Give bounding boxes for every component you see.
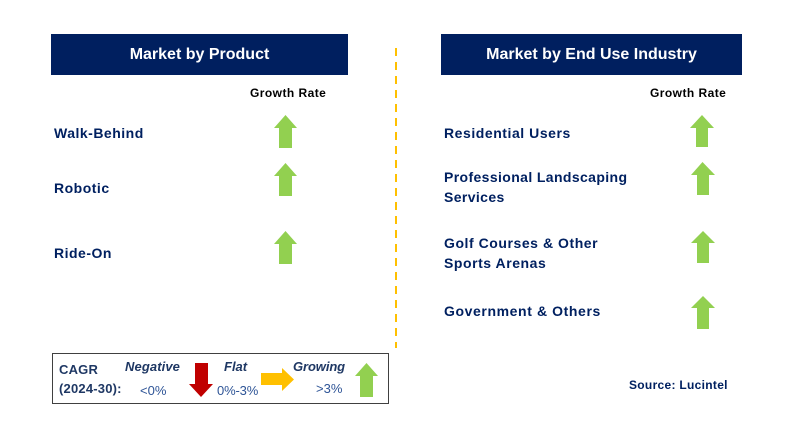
column heading: growth rate right: Growth Rate [650,86,726,100]
label: walk-behind: Walk-Behind [54,125,144,141]
legend title: (2024-30): [59,381,122,396]
panel header: market by product: Market by Product [130,46,269,63]
legend: flat range: 0%-3% [217,383,258,398]
label: golf courses and other sports arenas: Golf Courses & Other [444,235,598,251]
label: golf courses and other sports arenas [444,235,598,271]
label: ride-on: Ride-On [54,245,112,261]
label: government and others: Government & Others [444,303,601,319]
legend: negative range: <0% [140,383,166,398]
legend title [59,362,122,396]
label: golf courses and other sports arenas: Sports Arenas [444,255,546,271]
source note: Source: Lucintel [629,378,728,392]
legend: flat: Flat [224,359,247,374]
label: professional landscaping services: Services [444,189,505,205]
legend: negative: Negative [125,359,180,374]
label: professional landscaping services [444,169,627,205]
label: professional landscaping services: Professional Landscaping [444,169,627,185]
legend: growing range: >3% [316,381,342,396]
panel header: market by end use industry: Market by End Use Industry [486,46,697,63]
column heading: growth rate left: Growth Rate [250,86,326,100]
panel header: market by product [51,34,348,75]
legend: growing: Growing [293,359,345,374]
legend title: CAGR [59,362,98,377]
icon: legend arrows [189,363,378,397]
label: robotic: Robotic [54,180,110,196]
panel header: market by end use industry [441,34,742,75]
label: residential users: Residential Users [444,125,571,141]
legend: cagr [52,353,389,404]
